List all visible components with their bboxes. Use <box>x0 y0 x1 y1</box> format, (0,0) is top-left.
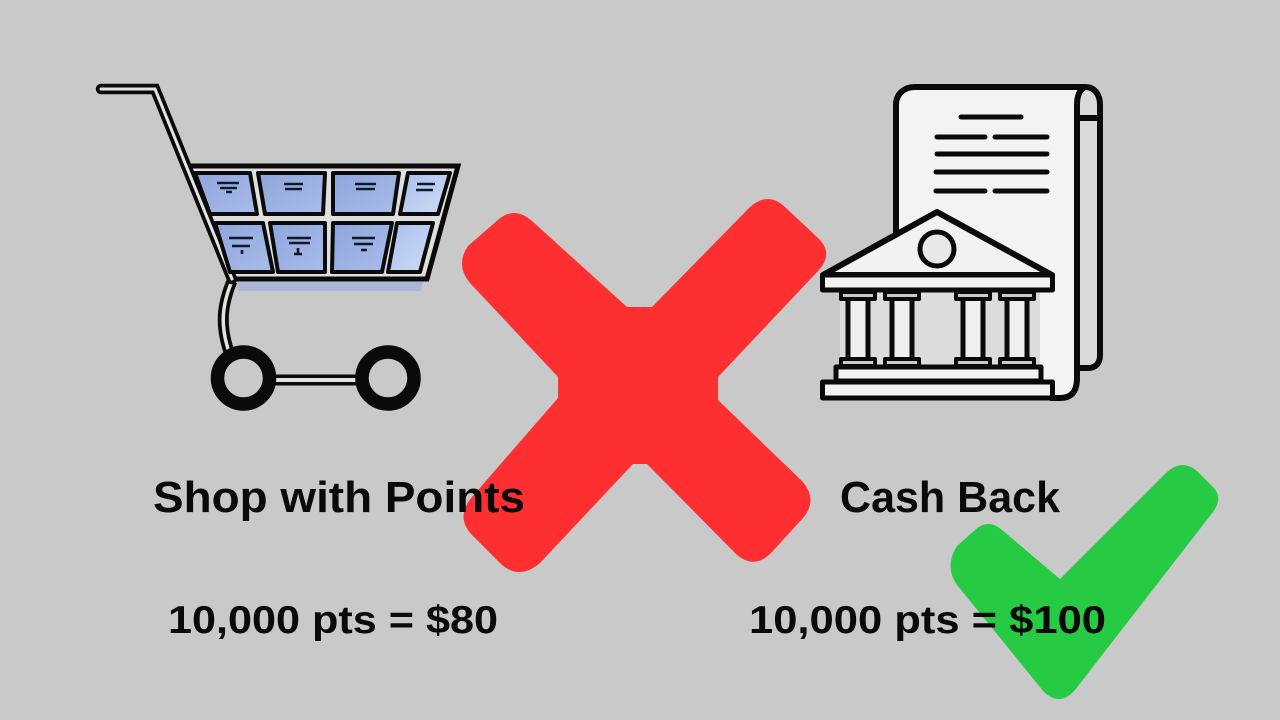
column capitals and bases <box>841 292 1034 366</box>
icon: red X mark <box>462 199 826 572</box>
cart handle and frame <box>101 89 458 380</box>
value: points to dollars for shopping: 10,000 pts = $80 <box>168 599 498 642</box>
document page <box>896 87 1085 398</box>
bank roof medallion <box>920 232 954 266</box>
heading: Shop with Points: Shop with Points <box>153 473 525 522</box>
bank entablature <box>822 275 1052 290</box>
cart basket body <box>190 166 458 279</box>
heading: Cash Back: Cash Back <box>840 473 1061 522</box>
cart item marks <box>217 183 435 254</box>
bank columns <box>848 296 1027 362</box>
icon: shopping cart <box>101 89 458 404</box>
document back sheet <box>1070 87 1100 368</box>
bank interior <box>840 290 1040 368</box>
cart wheels <box>218 352 414 404</box>
document outline <box>896 87 1100 398</box>
icon: green check mark <box>950 465 1218 699</box>
icon: bank building <box>822 212 1052 398</box>
bank roof <box>823 212 1052 275</box>
document text lines <box>936 117 1047 191</box>
bank steps <box>822 367 1052 398</box>
cart blue shadow <box>237 282 423 291</box>
value: points to dollars for cash back: 10,000 pts = $100 <box>749 599 1106 642</box>
icon: bank statement document <box>896 87 1100 398</box>
cart basket cells <box>195 173 450 272</box>
